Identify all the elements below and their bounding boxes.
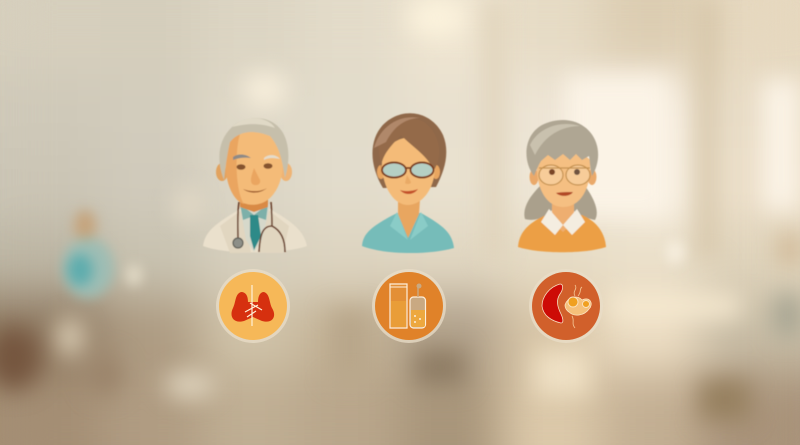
doctor brows: [233, 154, 251, 160]
character: grandmother: [518, 120, 606, 252]
doctor nose: [251, 168, 260, 185]
airway lines: [245, 285, 262, 326]
nurse neck: [398, 200, 420, 238]
grandmother ears: [530, 169, 538, 185]
digestive organ: [565, 297, 591, 315]
character: doctor: [203, 118, 307, 253]
nurse face: [382, 138, 435, 205]
doctor shirt and tie: [240, 205, 270, 252]
nurse fringe: [378, 119, 439, 170]
vessel squiggles: [572, 285, 582, 328]
lungs shape: [231, 292, 274, 322]
doctor neck: [240, 195, 268, 212]
nurse ears: [377, 165, 385, 179]
nurse teal top: [362, 213, 454, 253]
nurse nose: [405, 175, 411, 184]
grandmother collar: [541, 209, 585, 235]
doctor white coat: [203, 208, 307, 252]
doctor hair: [219, 118, 288, 180]
doctor smile: [243, 188, 267, 193]
grandmother side hair: [524, 186, 597, 220]
icon: test tubes badge: [372, 269, 446, 343]
kidney: [542, 284, 563, 323]
character: nurse: [362, 113, 454, 253]
tall tube: [390, 284, 407, 328]
doctor face: [225, 131, 283, 205]
doctor eyes: [236, 164, 246, 170]
grandmother glasses: [539, 165, 590, 185]
icon: lungs and heart badge: [216, 269, 290, 343]
icon: kidney and organ badge: [529, 269, 603, 343]
short tube: [410, 297, 426, 328]
grandmother neck: [552, 200, 574, 232]
grandmother orange sweater: [518, 215, 606, 252]
nurse mouth: [400, 189, 418, 194]
dropper: [417, 287, 419, 297]
doctor ears: [216, 163, 228, 181]
grandmother eyes: [549, 169, 555, 175]
doctor stethoscope: [238, 202, 285, 252]
nurse glasses: [382, 162, 434, 178]
grandmother face: [537, 151, 590, 207]
grandmother mouth: [556, 192, 573, 196]
nurse hair back: [372, 113, 446, 188]
grandmother hair: [526, 120, 598, 176]
